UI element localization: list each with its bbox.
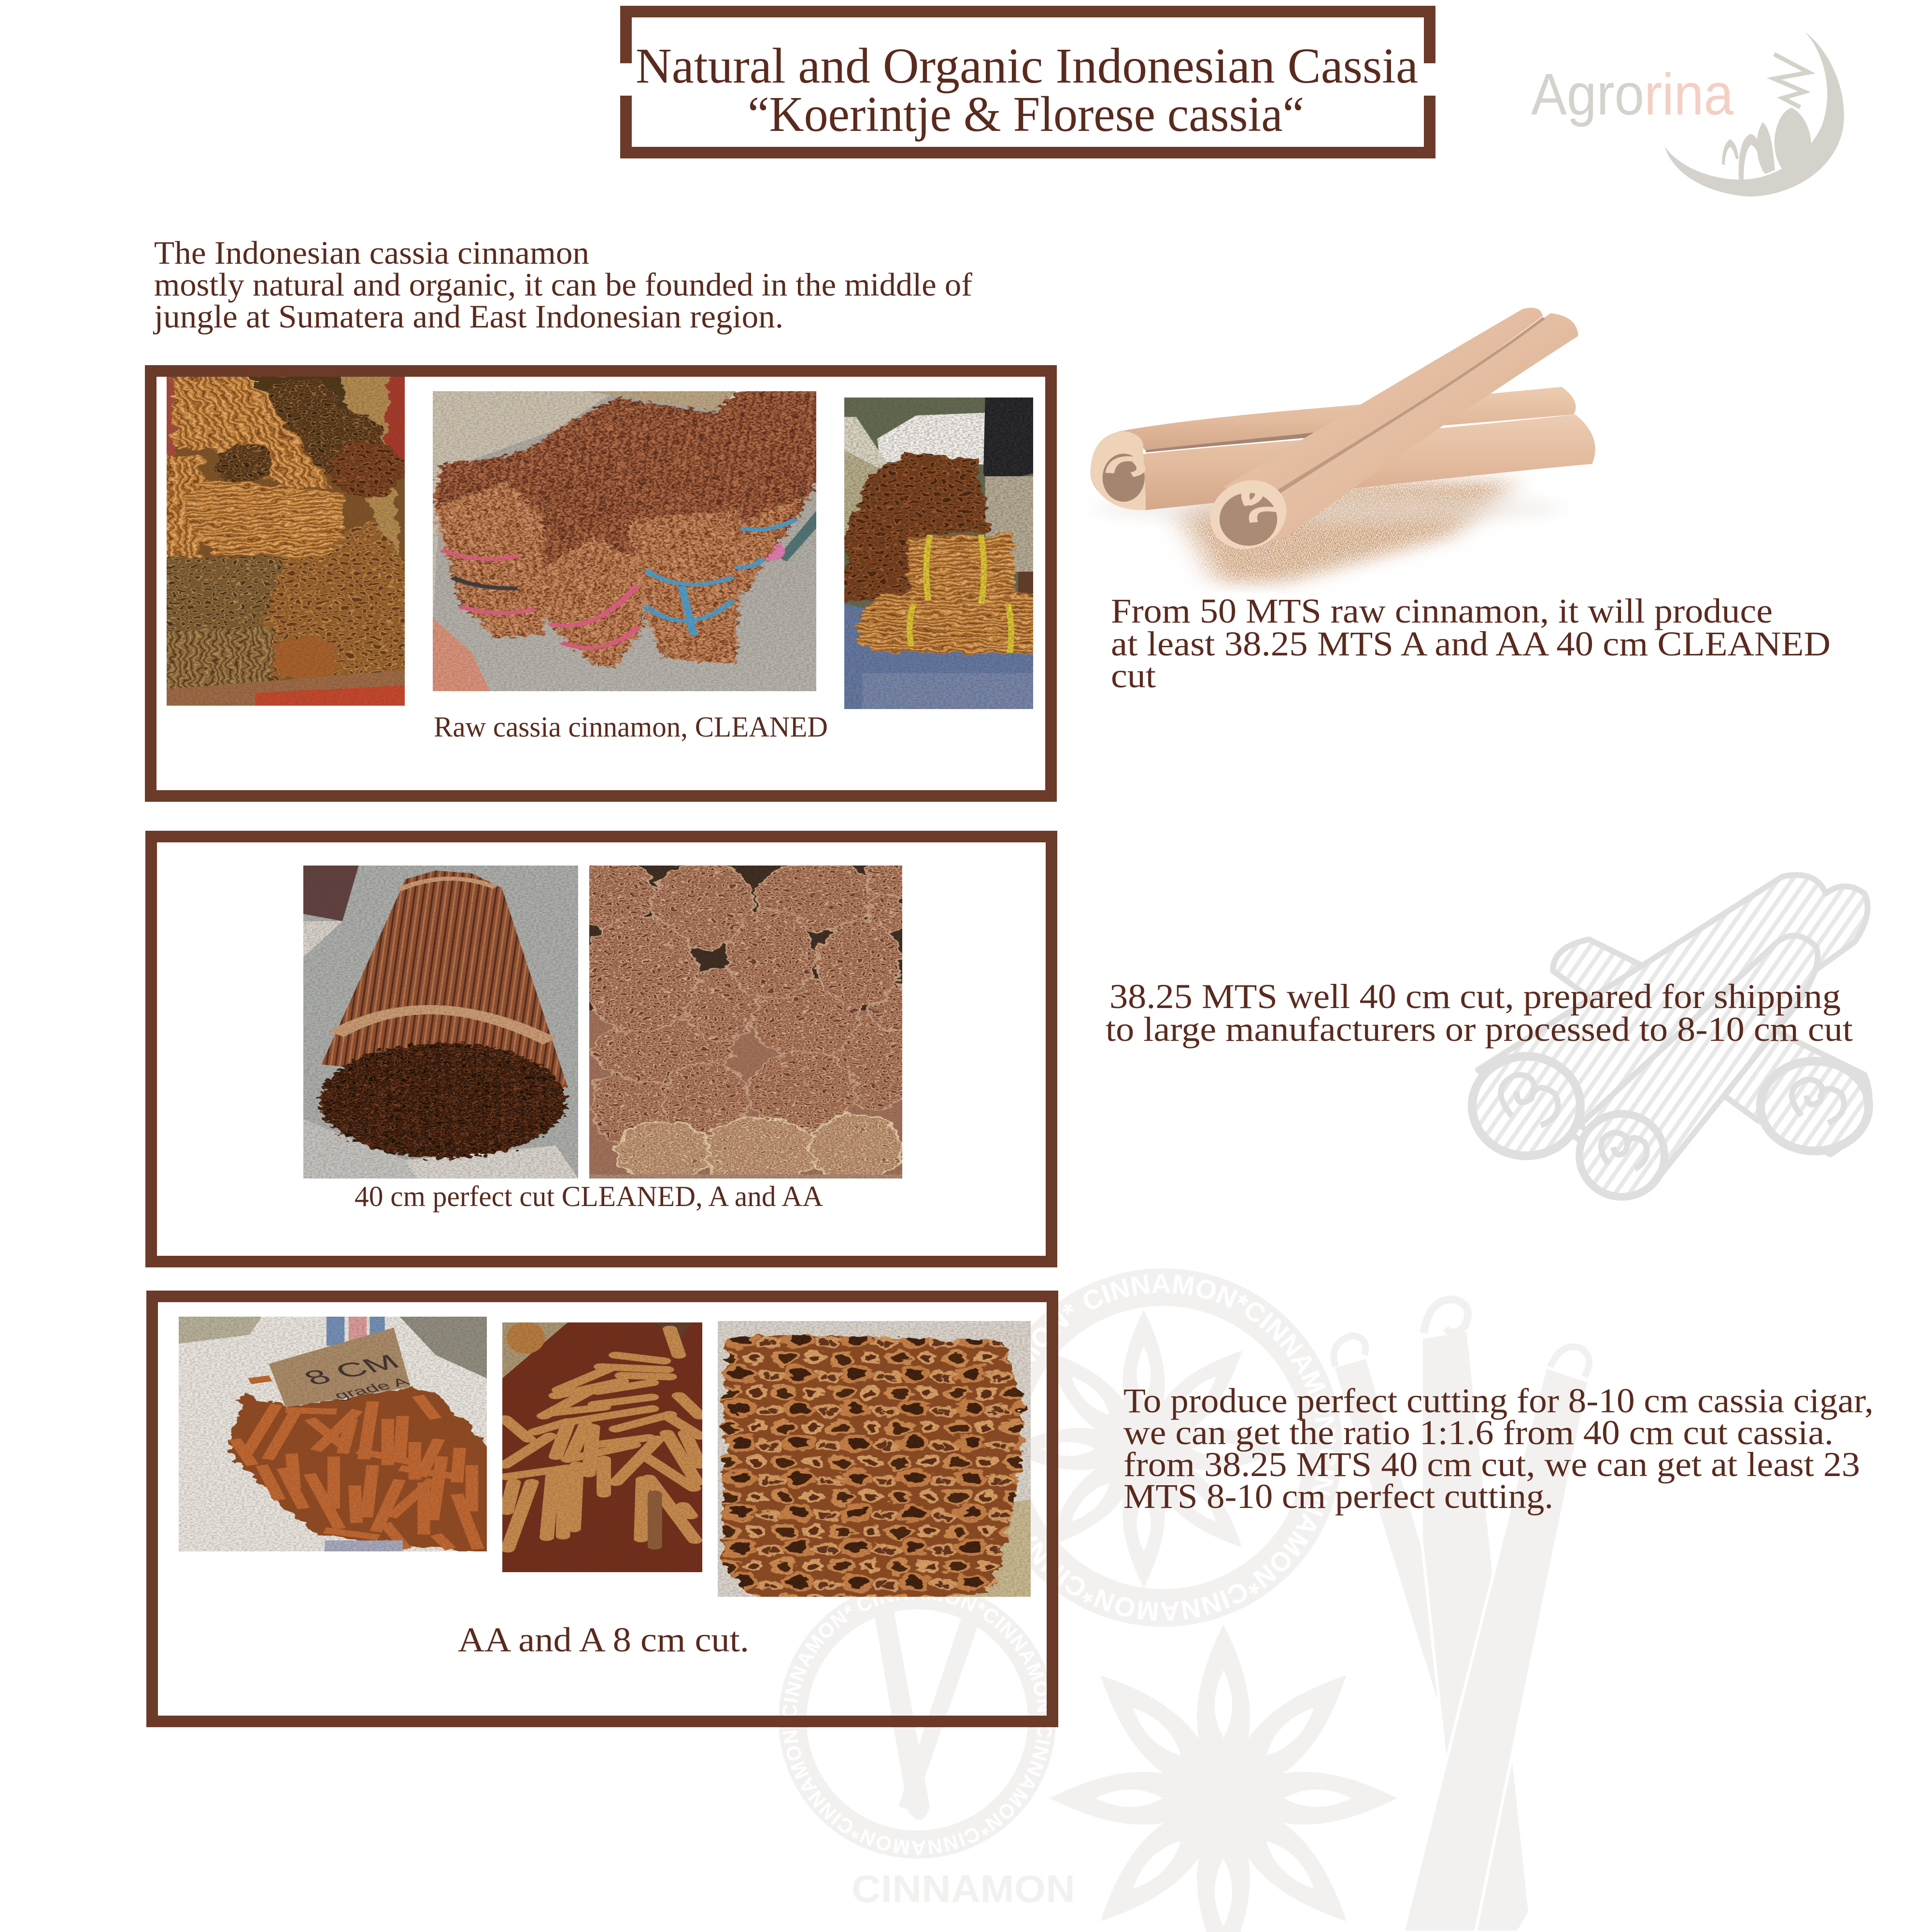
illustration: cinnamon sticks colour xyxy=(1090,308,1595,582)
photo: cut sticks on table xyxy=(502,1322,702,1572)
logo: Agrorina xyxy=(1531,31,1844,197)
logo wordmark: Agrorina xyxy=(1531,61,1733,127)
watermark: CINNAMON word: CINNAMON xyxy=(852,1867,1075,1910)
text: 38.25 MTS: to large manufacturers or processed to 8-10 cm cut xyxy=(1106,1010,1853,1049)
text: 8-10 cm ratio: we can get the ratio 1:1.6 from 40 cm cut cassia. xyxy=(1123,1413,1833,1452)
lying sticks xyxy=(1118,387,1576,451)
photo: bundle cross sections xyxy=(565,856,919,1185)
watermark: cinnamon badge small: CINNAMON*CINNAMON*CINNAMON*CINNAMON*CINNAMON*CINNAMON* xyxy=(782,1597,1052,1855)
text: 8-10 cm ratio: from 38.25 MTS 40 cm cut, we can get at least 23 xyxy=(1123,1445,1860,1484)
text: 50 MTS yield xyxy=(1111,592,1831,695)
intro text: jungle at Sumatera and East Indonesian region. xyxy=(153,298,783,335)
text: 8-10 cm ratio: MTS 8-10 cm perfect cutting. xyxy=(1123,1477,1553,1516)
caption: raw cassia: Raw cassia cinnamon, CLEANED xyxy=(434,711,828,743)
photo: bundles with coloured ties xyxy=(433,389,823,691)
text: 8-10 cm ratio: To produce perfect cutting for 8-10 cm cassia cigar, xyxy=(1123,1381,1874,1420)
watermark: cinnamon badge large: CINNAMON*CINNAMON*CINNAMON*CINNAMON*CINNAMON*CINNAMON* xyxy=(1031,1274,1336,1621)
text: 38.25 MTS: 38.25 MTS well 40 cm cut, prepared for shipping xyxy=(1109,977,1841,1016)
caption: 8 cm: AA and A 8 cm cut. xyxy=(458,1620,749,1659)
intro text: The Indonesian cassia cinnamon xyxy=(154,234,589,271)
title: Natural and Organic Indonesian Cassia xyxy=(636,38,1418,94)
panel: raw cassia xyxy=(151,371,1051,796)
powder xyxy=(1179,481,1517,582)
text: 8-10 cm ratio xyxy=(1123,1381,1874,1516)
handwritten label: grade A xyxy=(330,1375,413,1402)
title: “Koerintje & Florese cassia“ xyxy=(748,86,1304,142)
photo: single bundle xyxy=(303,866,578,1179)
panel: 40 cm cut xyxy=(151,837,1051,1262)
intro text: mostly natural and organic, it can be founded in the middle of xyxy=(154,266,972,303)
caption: 40 cm: 40 cm perfect cut CLEANED, A and AA xyxy=(355,1180,823,1212)
text: 50 MTS yield: cut xyxy=(1111,656,1156,695)
text: 38.25 MTS xyxy=(1106,977,1853,1049)
text: 50 MTS yield: From 50 MTS raw cinnamon, it will produce xyxy=(1111,592,1773,630)
logo crescent xyxy=(1664,31,1844,197)
handwritten label xyxy=(298,1350,419,1404)
photo: truck of mixed cinnamon xyxy=(167,377,405,706)
illustration: engraved cinnamon sticks xyxy=(1472,875,1870,1197)
title frame xyxy=(620,6,1435,158)
panel frame xyxy=(151,837,1051,1262)
watermark: large cinnamon sticks xyxy=(1333,1299,1589,1932)
text: 50 MTS yield: at least 38.25 MTS A and AA 40 cm CLEANED xyxy=(1111,625,1831,663)
diagonal stick xyxy=(1223,308,1543,499)
photo: loaded truck with yellow-tied bundles xyxy=(844,398,1042,709)
handwritten label: 8 CM xyxy=(298,1350,406,1390)
title xyxy=(636,38,1418,142)
panel: 8 cm cut xyxy=(152,1296,1052,1721)
intro text xyxy=(153,234,972,335)
panel frame xyxy=(151,371,1051,796)
watermark: star anise xyxy=(1050,1624,1397,1932)
photo: cigar rolls in plastic xyxy=(718,1321,1031,1601)
panel frame xyxy=(152,1296,1052,1721)
photo: sack of grade A xyxy=(179,1317,496,1555)
